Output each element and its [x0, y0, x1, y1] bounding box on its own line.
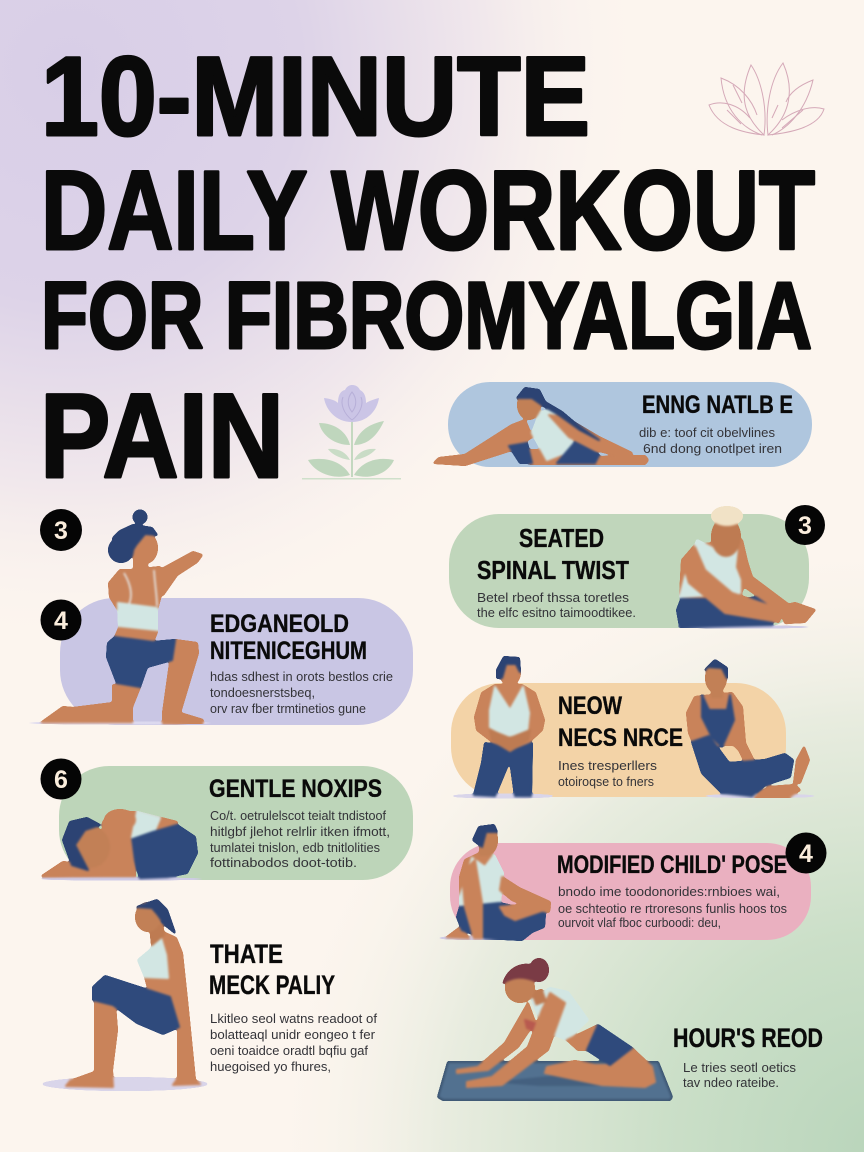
- panel background: [451, 683, 786, 797]
- figure: standing knee raise: [42, 900, 208, 1091]
- description: tumlatei tnislon, edb tnitlolities: [210, 840, 380, 855]
- description: Co/t. oetrulelscot teialt tndistoof: [210, 808, 386, 823]
- description: bolatteaql unidr eongeo t fer: [210, 1027, 376, 1042]
- figure: kneeling lunge: [20, 510, 220, 724]
- badge: 4 right: 4: [799, 840, 813, 868]
- icon: purple lotus flower: [302, 385, 401, 480]
- panel: blue stretch: [434, 382, 812, 467]
- panel background: [60, 598, 413, 725]
- description: [210, 808, 390, 870]
- description: fottinabodos doot-totib.: [210, 855, 357, 870]
- panel: modified child's pose: [437, 825, 811, 940]
- description: Betel rbeof thssa toretles: [477, 590, 630, 605]
- figure: mat stretch: [438, 958, 672, 1100]
- heading: MECK PALIY: [209, 970, 335, 1000]
- icon: outline lotus: [709, 63, 824, 135]
- badge: 6 left: 6: [54, 766, 68, 794]
- badge: 3 left: [40, 509, 82, 551]
- description: orv rav fber trmtinetios gune: [210, 701, 366, 716]
- figure: seated man: [675, 506, 815, 628]
- heading: SPINAL TWIST: [477, 555, 629, 585]
- badge: 4 left: [40, 600, 82, 640]
- description: huegoised yo fhures,: [210, 1059, 331, 1074]
- description: tav ndeo rateibe.: [683, 1075, 779, 1090]
- badge: 4 right: [786, 832, 826, 874]
- block: thate meck paly: [42, 900, 377, 1091]
- panel background: [450, 843, 811, 940]
- description: [558, 758, 658, 789]
- figure: seated forward stretch: [434, 388, 648, 465]
- description: otoiroqse to fners: [558, 774, 654, 789]
- description: tondoesnerstsbeq,: [210, 685, 315, 700]
- title: PAIN: [40, 369, 284, 503]
- block: hour's reod: [438, 958, 823, 1100]
- description: oe schteotio re rtroresons funlis hoos tos: [558, 901, 787, 916]
- description: 6nd dong onotlpet iren: [643, 441, 782, 456]
- heading: [558, 692, 683, 752]
- heading: NEOW: [558, 692, 622, 720]
- description: ourvoit vlaf fboc curboodi: deu,: [558, 915, 721, 930]
- badge: 3 right: 3: [798, 512, 812, 540]
- heading: THATE: [210, 939, 283, 969]
- description: hitlgbf jlehot relrlir itken ifmott,: [210, 824, 390, 839]
- figure: cross-legged seated: [437, 825, 550, 940]
- description: Le tries seotl oetics: [683, 1060, 797, 1075]
- figure: seated twist: [687, 660, 818, 798]
- heading: NECS NRCE: [558, 724, 683, 752]
- panel: lavender lunge: [20, 510, 413, 725]
- description: bnodo ime toodonorides:rnbioes wai,: [558, 884, 780, 899]
- description: the elfc esitno taimoodtikee.: [477, 605, 636, 620]
- panel: orange pose: [451, 657, 818, 798]
- heading: EDGANEOLD: [210, 610, 349, 638]
- description: [683, 1060, 797, 1090]
- badge: 4 left: 4: [54, 607, 68, 635]
- panel background: [59, 766, 413, 880]
- badge: 3 left: 3: [54, 517, 68, 545]
- heading: [209, 939, 335, 1000]
- panel: gentle pose: [34, 766, 413, 880]
- description: [477, 590, 636, 620]
- heading: ENNG NATLB E: [642, 391, 793, 419]
- description: [210, 1011, 377, 1074]
- panel: seated spinal twist: [449, 506, 815, 628]
- figure: curled forward: [34, 809, 210, 880]
- description: Ines tresperllers: [558, 758, 658, 773]
- heading: HOUR'S REOD: [673, 1023, 823, 1053]
- badge: 6 left: [40, 758, 82, 800]
- description: [639, 425, 782, 456]
- panel background: [449, 514, 809, 628]
- description: Lkitleo seol watns readoot of: [210, 1011, 377, 1026]
- panel background: [448, 382, 812, 467]
- heading: MODIFIED CHILD' POSE: [557, 851, 787, 879]
- title: [40, 34, 815, 503]
- badge: 3 right: [785, 505, 825, 545]
- heading: SEATED: [519, 523, 604, 553]
- heading: NITENICEGHUM: [210, 637, 367, 665]
- description: dib e: toof cit obelvlines: [639, 425, 775, 440]
- description: hdas sdhest in orots bestlos crie: [210, 669, 393, 684]
- figure: standing: [451, 657, 555, 798]
- title: 10-MINUTE: [41, 34, 590, 159]
- description: [558, 884, 787, 930]
- description: oeni toaidce oradtl bqfiu gaf: [210, 1043, 368, 1058]
- description: [210, 669, 393, 716]
- heading: [210, 610, 367, 665]
- heading: GENTLE NOXIPS: [209, 775, 382, 803]
- heading: [477, 523, 629, 585]
